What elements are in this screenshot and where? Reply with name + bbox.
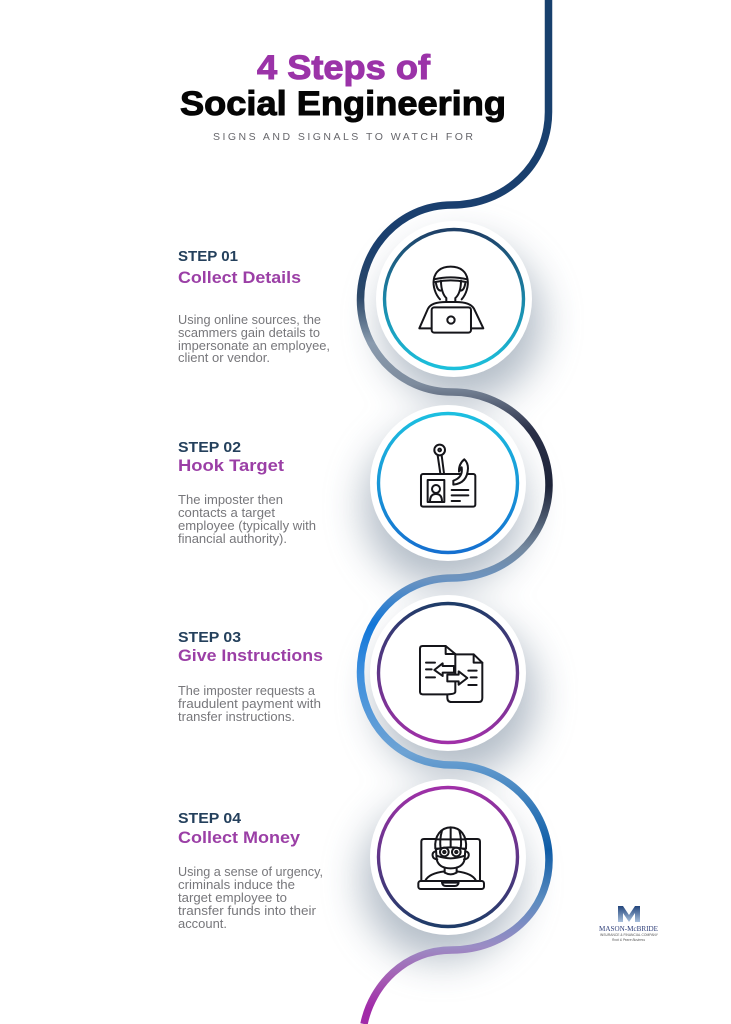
icon: masked criminal on laptop — [418, 827, 484, 889]
step 01 heading: Collect Details — [178, 268, 301, 287]
step 04 description: target employee to — [178, 891, 287, 905]
circle badge 1 — [376, 221, 532, 377]
step 04 description: Using a sense of urgency, — [178, 865, 323, 879]
step 02 heading: STEP 02 — [178, 439, 241, 456]
step 02 description — [178, 493, 316, 546]
circle badge 4 — [370, 779, 526, 935]
panel: step 04 — [178, 810, 323, 931]
step 02 description: contacts a target — [178, 506, 276, 520]
step 03 heading — [178, 629, 323, 665]
step 04 heading: Collect Money — [178, 828, 301, 847]
panel: step 02 — [178, 439, 316, 546]
step 04 heading: STEP 04 — [178, 810, 242, 827]
step 02 heading: Hook Target — [178, 456, 284, 475]
step 03 heading: Give Instructions — [178, 646, 323, 665]
step 04 description: transfer funds into their — [178, 904, 316, 918]
step 02 description: financial authority). — [178, 532, 287, 546]
title: 4 Steps of — [257, 49, 431, 87]
panel: step 03 — [178, 629, 323, 724]
step 02 description: The imposter then — [178, 493, 283, 507]
step 03 heading: STEP 03 — [178, 629, 241, 646]
circle badge 3 — [370, 595, 526, 751]
logo mark — [618, 906, 640, 922]
step 01 heading — [178, 248, 301, 287]
panel: step 01 — [178, 248, 330, 365]
step 01 heading: STEP 01 — [178, 248, 238, 265]
step 04 heading — [178, 810, 301, 847]
circle drop shadows — [362, 242, 542, 960]
icon: exchanging documents — [420, 646, 482, 702]
circle badge 2 — [370, 405, 526, 561]
logo motto: Rock & Peace Business — [612, 938, 645, 942]
step 03 description: fraudulent payment with — [178, 697, 321, 711]
step 01 description: impersonate an employee, — [178, 339, 330, 353]
subtitle: SIGNS AND SIGNALS TO WATCH FOR — [213, 131, 473, 143]
logo tagline: INSURANCE & FINANCIAL COMPANY — [600, 933, 659, 937]
step 01 description — [178, 313, 330, 365]
winding gradient ribbon — [360, 0, 549, 1024]
title: Social Engineering — [180, 85, 506, 123]
step 04 description — [178, 865, 323, 931]
step 03 description: transfer instructions. — [178, 710, 295, 724]
step 01 description: Using online sources, the — [178, 313, 321, 327]
step 01 description: scammers gain details to — [178, 326, 320, 340]
step 04 description: account. — [178, 917, 227, 931]
step 02 heading — [178, 439, 284, 475]
step 03 description — [178, 684, 321, 724]
logo: Mason-McBride — [599, 906, 659, 942]
title — [180, 49, 506, 123]
icon: ID card on fishing hook — [421, 445, 475, 507]
step 03 description: The imposter requests a — [178, 684, 315, 698]
step 04 description: criminals induce the — [178, 878, 295, 892]
step 02 description: employee (typically with — [178, 519, 316, 533]
icon: hooded hacker at laptop — [419, 267, 483, 333]
step 01 description: client or vendor. — [178, 351, 270, 365]
logo wordmark: MASON-McBRIDE — [599, 925, 659, 933]
